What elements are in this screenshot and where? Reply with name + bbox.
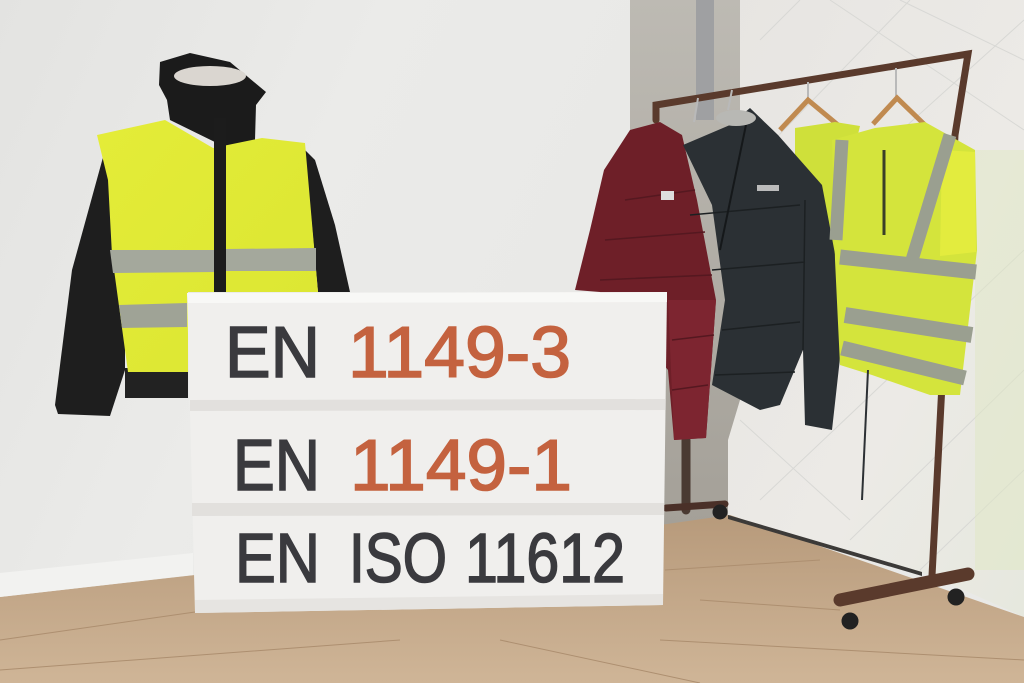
jacket hem: [125, 368, 188, 398]
sign line 1: EN: [225, 313, 320, 393]
sign line 2: 1149-1: [350, 426, 572, 506]
reflective band right: [226, 248, 316, 271]
collar lining: [174, 66, 246, 86]
sign line 3: ISO: [349, 519, 447, 597]
clothes rack: [656, 54, 968, 629]
reflective band left: [110, 250, 216, 273]
sign line 2: EN: [233, 426, 320, 506]
wooden floor and skirting: [0, 515, 1024, 683]
sign line 2: [233, 426, 572, 506]
collar: [159, 53, 266, 147]
sign line 3: EN: [235, 519, 320, 597]
black right sleeve: [305, 150, 350, 292]
sign board: [187, 292, 667, 613]
sign line 1: 1149-3: [348, 313, 571, 393]
back hi-vis vest: [795, 122, 860, 365]
jacket with hi-vis vest on the left: [55, 53, 350, 416]
sign line 3: 11612: [465, 519, 625, 597]
hangers: [694, 68, 925, 130]
sign line 1: [225, 313, 571, 393]
reflective band lower: [119, 303, 187, 328]
zip: [214, 118, 226, 292]
black left sleeve: [55, 150, 125, 416]
main hi-vis vest on the rack: [832, 122, 977, 500]
yellow vest body: [97, 120, 318, 372]
maroon quilted jacket: [575, 122, 716, 440]
dark grey jacket: [683, 108, 842, 430]
sign line 3: [235, 519, 625, 597]
